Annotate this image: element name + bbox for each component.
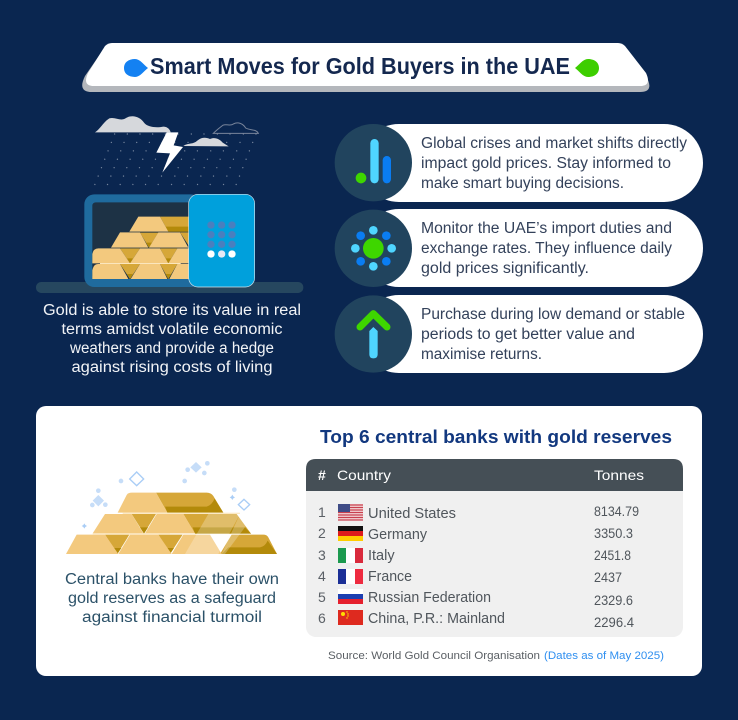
text block: gold stores value: Gold is able to store its value in real	[43, 302, 301, 319]
text block: central banks: Central banks have their own	[65, 571, 279, 588]
flag: Russia	[338, 589, 363, 604]
glare	[185, 514, 240, 554]
tonnes values: 2451.8	[594, 548, 631, 563]
text: tip 1: make smart buying decisions.	[421, 175, 624, 192]
source note: Source: World Gold Council Organisation	[328, 650, 540, 662]
icon: green droplet	[575, 59, 599, 77]
safe door	[189, 194, 255, 287]
shelf	[36, 282, 303, 293]
text: tip 3	[421, 306, 685, 363]
cloud: large	[95, 116, 171, 132]
country names: Germany	[368, 527, 428, 543]
text: tip 3: periods to get better value and	[421, 326, 635, 343]
text block: central banks	[65, 571, 279, 626]
icon: up arrow	[335, 295, 412, 373]
text: tip 2: exchange rates. They influence daily	[421, 240, 672, 257]
keypad	[207, 221, 236, 258]
flag: Italy	[338, 548, 363, 563]
text: tip 2: Monitor the UAE’s import duties and	[421, 220, 672, 237]
flag: United States	[338, 504, 363, 520]
tonnes values: 2296.4	[594, 615, 634, 630]
icon: radiating dots	[335, 210, 412, 287]
row numbers: 1	[318, 504, 326, 520]
rain	[92, 134, 256, 193]
row numbers	[318, 504, 326, 626]
safe body	[84, 194, 201, 287]
country names: Russian Federation	[368, 590, 491, 606]
flag: France	[338, 569, 363, 584]
flag: Germany	[338, 526, 363, 541]
icon: lightning	[156, 132, 183, 173]
bottom row bars	[220, 535, 277, 554]
country names: China, P.R.: Mainland	[368, 611, 505, 627]
table header: Country	[337, 467, 391, 483]
text: tip 1: impact gold prices. Stay informed to	[421, 155, 671, 172]
gold bars	[92, 217, 190, 279]
heading: top 6 central banks: Top 6 central banks with gold reserves	[320, 426, 672, 447]
tonnes values: 3350.3	[594, 526, 633, 541]
heading: title: Smart Moves for Gold Buyers in the UAE	[150, 53, 570, 79]
row numbers: 5	[318, 589, 326, 605]
illustration: gold bars with sparkles	[66, 461, 277, 554]
cloud: outline	[213, 123, 258, 133]
safe interior with gold	[92, 202, 192, 279]
tonnes values: 2437	[594, 570, 622, 585]
country names: France	[368, 569, 412, 585]
tonnes values: 2329.6	[594, 593, 633, 608]
icon: bar chart	[335, 124, 412, 201]
text: tip 3: maximise returns.	[421, 346, 542, 363]
country names: United States	[368, 506, 456, 522]
middle row bars	[183, 514, 251, 534]
row numbers: 3	[318, 547, 326, 563]
tonnes values: 8134.79	[594, 504, 639, 519]
tonnes values	[594, 504, 639, 630]
cloud: small	[183, 138, 229, 146]
table header	[306, 459, 683, 491]
icon: blue droplet	[124, 59, 148, 77]
panel: tip 2 import duties	[335, 209, 703, 287]
panel: tip 1 global crises	[335, 124, 703, 202]
row numbers: 4	[318, 568, 326, 584]
text: tip 1	[421, 135, 687, 192]
row numbers: 6	[318, 610, 326, 626]
text: tip 2: gold prices significantly.	[421, 260, 589, 277]
text: tip 1: Global crises and market shifts directly	[421, 135, 687, 152]
text block: central banks: against financial turmoil	[82, 609, 262, 626]
flag: China	[338, 610, 363, 625]
table header: #	[318, 467, 326, 483]
illustration: gold safe in a storm	[36, 116, 303, 293]
text: tip 3: Purchase during low demand or stable	[421, 306, 685, 323]
table header: Tonnes	[594, 467, 644, 483]
text: tip 2	[421, 220, 672, 277]
text block: central banks: gold reserves as a safeguard	[68, 590, 276, 607]
country names: Italy	[368, 548, 395, 564]
source note	[328, 650, 664, 662]
top bar	[156, 493, 223, 513]
sparkles	[82, 461, 250, 529]
text block: gold stores value	[43, 302, 301, 376]
text block: gold stores value: against rising costs of living	[72, 359, 272, 376]
table: gold reserves	[306, 459, 683, 637]
panel: central bank reserves	[36, 406, 702, 676]
title banner	[82, 43, 649, 92]
panel: tip 3 purchase timing	[335, 295, 703, 373]
text block: gold stores value: terms amidst volatile economic	[62, 321, 283, 338]
text block: gold stores value: weathers and provide a hedge	[69, 340, 274, 357]
row numbers: 2	[318, 525, 326, 541]
country names	[368, 506, 505, 627]
source note: (Dates as of May 2025)	[544, 650, 664, 662]
